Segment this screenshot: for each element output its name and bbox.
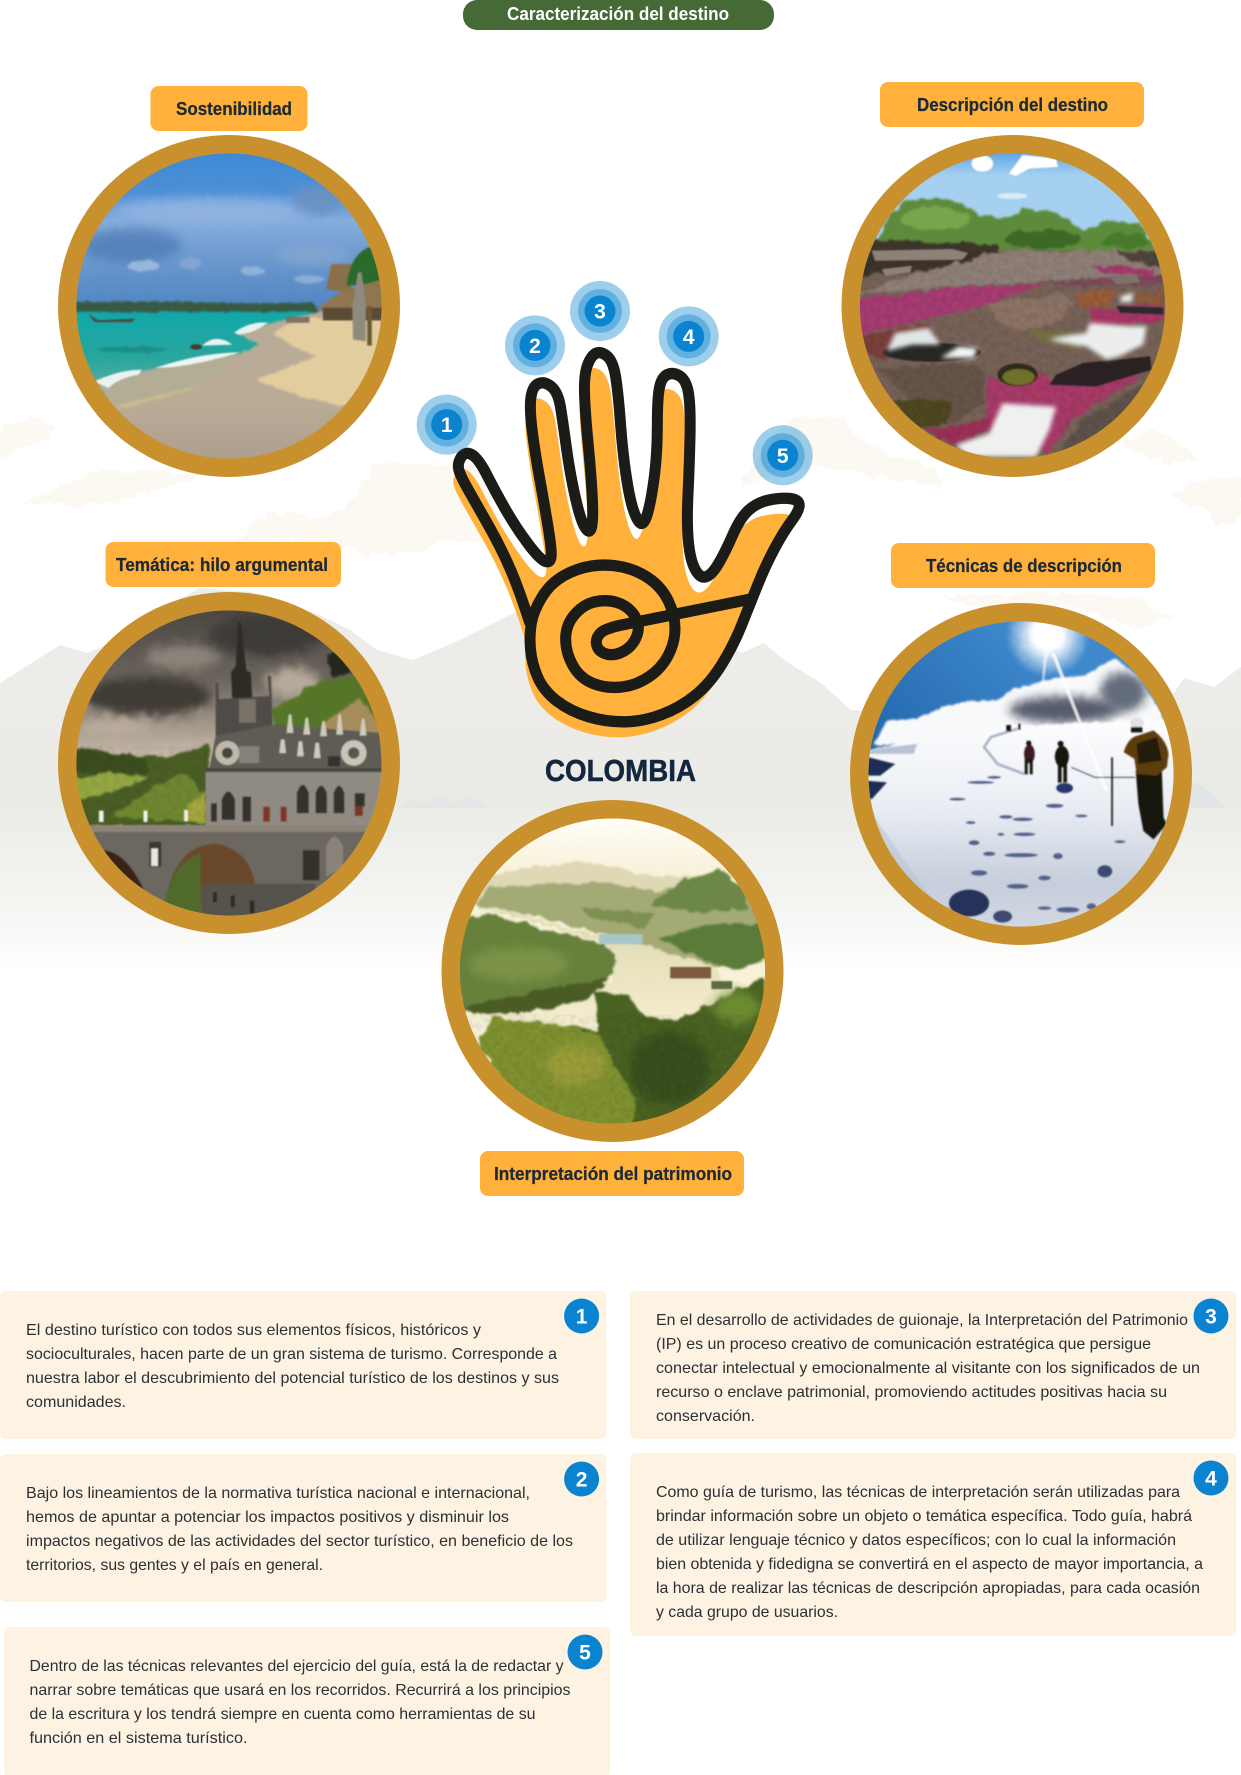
card 4 text: de utilizar lenguaje técnico y datos específicos; con lo cual la información [656,1532,1176,1549]
title pill: Caracterización del destino [507,4,729,24]
label: Técnicas de descripción: Técnicas de descripción [926,556,1122,576]
card 2 text: territorios, sus gentes y el país en general. [26,1557,323,1574]
badge 1 [564,1298,599,1334]
background: clouds and mountains [0,417,1241,975]
COLOMBIA heading: COLOMBIA [545,753,696,788]
photo circle: snow expedition [850,593,1192,945]
card 3 text: (IP) es un proceso creativo de comunicación estratégica que persigue [656,1336,1151,1353]
finger marker 3: 3 [594,300,606,324]
panel: text card 4 [630,1453,1236,1636]
finger marker 5: 5 [777,445,789,468]
panel: text card 5 [4,1627,610,1775]
card 4 text: la hora de realizar las técnicas de descripción apropiadas, para cada ocasión [656,1580,1200,1597]
finger marker 2: 2 [529,335,541,358]
hand: black outline and spiral [458,353,799,722]
title pill [463,0,774,30]
badge 3 [1194,1298,1228,1334]
badge 5 [568,1634,602,1670]
card 3 text: En el desarrollo de actividades de guionaje, la Interpretación del Patrimonio [656,1312,1188,1329]
panel: text card 2 [0,1454,606,1602]
card 3 text: recurso o enclave patrimonial, promoviendo actitudes positivas hacia su [656,1384,1167,1401]
card 2 text [26,1485,573,1574]
card 3 text: conservación. [656,1408,755,1425]
finger marker 3 [570,281,630,341]
panel: text card 1 [0,1291,606,1439]
card 4 text: y cada grupo de usuarios. [656,1604,838,1621]
label: Temática: hilo argumental: Temática: hilo argumental [116,555,328,575]
card 1 text: comunidades. [26,1394,126,1411]
label: Sostenibilidad: Sostenibilidad [176,99,292,119]
hand: orange fill [453,368,794,737]
finger marker 5 [753,425,813,485]
finger marker 4: 4 [683,326,695,349]
label: Técnicas de descripción [891,543,1155,588]
label: Descripción del destino: Descripción del destino [917,95,1108,115]
card 5 text: narrar sobre temáticas que usará en los recorridos. Recurrirá a los principios [30,1682,570,1699]
card 1 text: socioculturales, hacen parte de un gran sistema de turismo. Corresponde a [26,1346,557,1363]
badge 3: 3 [1205,1306,1217,1328]
card 5 text: Dentro de las técnicas relevantes del ejercicio del guía, está la de redactar y [30,1658,564,1675]
finger marker 4 [659,306,719,366]
card 4 text: brindar información sobre un objeto o temática específica. Todo guía, habrá [656,1508,1192,1525]
badge 4 [1194,1460,1228,1496]
card 3 text: conectar intelectual y emocionalmente al visitante con los significados de un [656,1360,1200,1377]
finger marker 1: 1 [441,414,453,437]
badge 2: 2 [576,1468,587,1492]
label: Interpretación del patrimonio [480,1151,744,1196]
finger marker 1 [417,395,477,455]
panel: text card 3 [630,1291,1236,1439]
label: Interpretación del patrimonio: Interpretación del patrimonio [494,1164,732,1184]
badge 4: 4 [1205,1468,1217,1490]
card 4 text: bien obtenida y fidedigna se convertirá en el aspecto de mayor importancia, a [656,1556,1203,1573]
photo circle: beach [58,135,400,480]
label: Temática: hilo argumental [106,542,341,587]
card 1 text [26,1322,559,1411]
label: Sostenibilidad [150,86,308,131]
card 1 text: El destino turístico con todos sus elementos físicos, históricos y [26,1322,481,1339]
card 3 text [656,1312,1200,1425]
card 2 text: Bajo los lineamientos de la normativa turística nacional e internacional, [26,1485,530,1502]
card 4 text: Como guía de turismo, las técnicas de interpretación serán utilizadas para [656,1484,1180,1501]
finger marker 2 [505,315,565,375]
card 2 text: impactos negativos de las actividades del sector turístico, en beneficio de los [26,1533,573,1550]
hand logo [453,353,799,737]
card 4 text [656,1484,1203,1621]
card 2 text: hemos de apuntar a potenciar los impactos positivos y disminuir los [26,1509,509,1526]
card 5 text: función en el sistema turístico. [30,1730,248,1747]
photo circle: Las Lajas church [58,592,400,936]
label: Descripción del destino [880,82,1144,127]
card 5 text: de la escritura y los tendrá siempre en cuenta como herramientas de su [30,1706,536,1723]
photo circle: river landscape [442,800,784,1142]
card 1 text: nuestra labor el descubrimiento del potencial turístico de los destinos y sus [26,1370,559,1387]
badge 5: 5 [579,1642,591,1664]
badge 1: 1 [576,1306,588,1328]
badge 2 [564,1462,599,1496]
card 5 text [30,1658,570,1747]
photo circle: Caño Cristales [842,135,1184,479]
